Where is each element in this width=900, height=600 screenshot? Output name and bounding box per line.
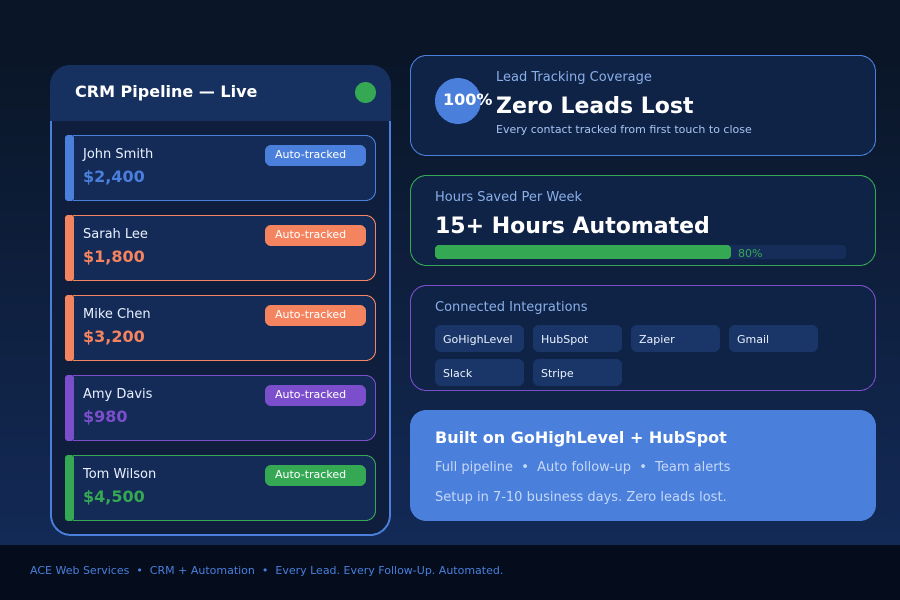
row: Amy Davis: [65, 375, 376, 441]
row: Tom Wilson: Tom Wilson: [82, 467, 156, 482]
card: hours saved: [410, 176, 876, 266]
row: Sarah Lee: [65, 215, 376, 281]
chip: GoHighLevel: GoHighLevel: [443, 333, 513, 346]
row: Tom Wilson: Auto-tracked: [275, 468, 346, 481]
chip: Slack: Slack: [443, 367, 473, 380]
row: John Smith: $2,400: [83, 167, 145, 186]
callout: built on: [410, 410, 876, 521]
chip: Zapier: Zapier: [639, 333, 675, 346]
callout: built on: Setup in 7-10 business days. Zero leads lost.: [435, 490, 727, 505]
chip: Gmail: Gmail: [737, 333, 769, 346]
row: John Smith: [65, 135, 376, 201]
progress bar: 80%: [738, 247, 762, 260]
row: Sarah Lee: $1,800: [83, 247, 145, 266]
row: Tom Wilson: [65, 455, 376, 521]
panel header: [50, 65, 391, 121]
row: John Smith: John Smith: [82, 147, 153, 162]
callout: built on: Built on GoHighLevel + HubSpot: [435, 428, 727, 447]
card: hours saved: Hours Saved Per Week: [435, 190, 582, 205]
heading: CRM Pipeline — Live: [75, 82, 258, 101]
row: Amy Davis: Amy Davis: [83, 387, 153, 402]
card: hours saved: 15+ Hours Automated: [435, 214, 710, 239]
icon: 100% badge: 100%: [443, 90, 492, 109]
row: Amy Davis: $980: [83, 407, 128, 426]
icon: 100% badge: [435, 78, 492, 124]
progress bar: [435, 245, 846, 260]
chip: HubSpot: HubSpot: [541, 333, 589, 346]
footer: [0, 545, 900, 600]
footer: ACE Web Services • CRM + Automation • Every Lead. Every Follow-Up. Automated.: [30, 564, 503, 577]
chip: GoHighLevel: [435, 325, 524, 352]
card: lead tracking coverage: Zero Leads Lost: [496, 94, 694, 119]
row: Mike Chen: $3,200: [83, 327, 145, 346]
chip: Stripe: [533, 359, 622, 386]
chip: HubSpot: [533, 325, 622, 352]
row: Amy Davis: Auto-tracked: [275, 388, 346, 401]
row: Tom Wilson: $4,500: [83, 487, 145, 506]
card: lead tracking coverage: Lead Tracking Coverage: [496, 70, 652, 85]
callout: built on: Full pipeline • Auto follow-up • Team alerts: [435, 460, 731, 475]
row: John Smith: Auto-tracked: [275, 148, 346, 161]
card: lead tracking coverage: Every contact tracked from first touch to close: [496, 123, 752, 136]
chip: Gmail: [729, 325, 818, 352]
card: integrations: Connected Integrations: [435, 300, 588, 315]
card: integrations: [410, 286, 876, 390]
card: lead tracking coverage: [410, 56, 876, 156]
chip: Slack: [435, 359, 524, 386]
row: Mike Chen: [65, 295, 376, 361]
status dot: [355, 82, 376, 103]
chip: Zapier: [631, 325, 720, 352]
row: Mike Chen: Auto-tracked: [275, 308, 346, 321]
panel: CRM pipeline: [50, 65, 391, 535]
row: Sarah Lee: Auto-tracked: [275, 228, 346, 241]
chip: Stripe: Stripe: [541, 367, 574, 380]
row: Sarah Lee: Sarah Lee: [83, 227, 148, 242]
row: Mike Chen: Mike Chen: [83, 307, 151, 322]
